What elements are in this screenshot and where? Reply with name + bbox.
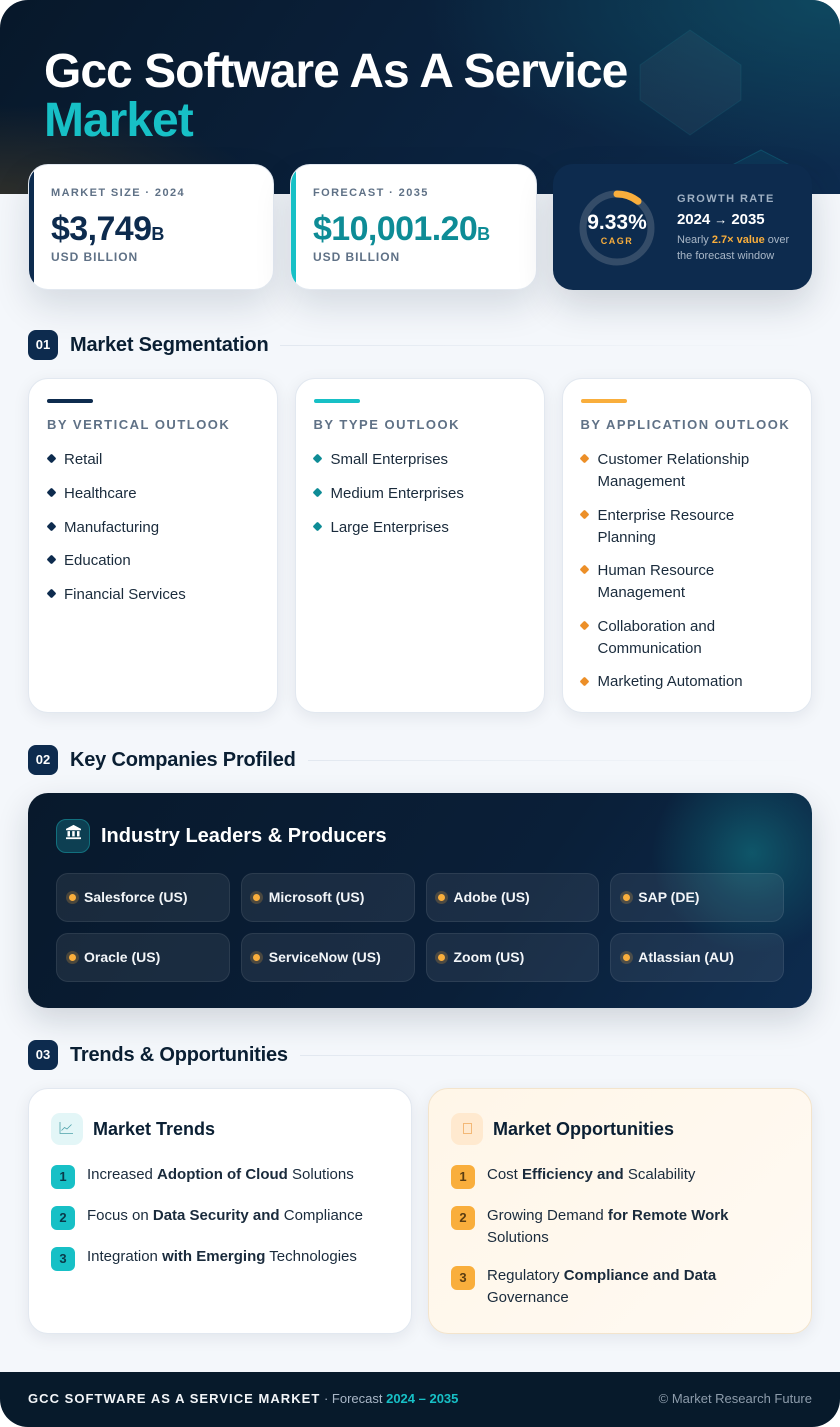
panel heading: Industry Leaders & Producers <box>101 825 387 847</box>
growth note: Nearly 2.7× value over <box>677 234 789 246</box>
panel: industry leaders: Atlassian (AU) <box>638 949 734 965</box>
CAGR value: 9.33% <box>587 211 647 234</box>
stat card: forecast: FORECAST · 2035 <box>313 187 429 199</box>
growth label: GROWTH RATE <box>677 193 775 205</box>
panel: market trends: Increased Adoption of Cloud Solutions <box>87 1166 354 1182</box>
section heading: market segmentation: Market Segmentation <box>70 334 268 356</box>
panel: by vertical outlook: Education <box>64 552 131 568</box>
CAGR donut <box>580 190 654 266</box>
section heading: trends: 03 <box>36 1047 50 1062</box>
panel: market opportunities: 2 <box>459 1210 467 1225</box>
stat card: forecast <box>290 164 537 290</box>
stat card: market size <box>28 164 274 290</box>
growth note <box>677 234 789 262</box>
icon: missing glyph box <box>451 1113 483 1145</box>
stat card: market size: $3,749B <box>51 210 164 248</box>
growth years: 2024 → 2035 <box>677 211 765 228</box>
panel: industry leaders: Zoom (US) <box>454 949 524 965</box>
footer credit: © Market Research Future <box>659 1391 812 1406</box>
section heading: trends: Trends & Opportunities <box>70 1044 288 1066</box>
panel: industry leaders: Oracle (US) <box>84 949 160 965</box>
panel: industry leaders: Microsoft (US) <box>269 889 364 905</box>
panel: by application outlook: Management <box>598 472 685 490</box>
growth note: the forecast window <box>677 250 774 262</box>
panel: market trends: 2 <box>59 1210 67 1225</box>
panel: market trends: 3 <box>59 1251 67 1266</box>
panel: industry leaders: Adobe (US) <box>454 889 530 905</box>
panel: market opportunities: 1 <box>459 1169 467 1184</box>
panel: market trends: 1 <box>59 1169 67 1184</box>
title: Gcc Software As A Service <box>44 45 627 98</box>
panel: by application outlook: Human Resource <box>598 562 714 578</box>
panel: by application outlook: Planning <box>598 528 656 546</box>
panel: industry leaders: ServiceNow (US) <box>269 949 381 965</box>
panel: market opportunities: 3 <box>459 1270 467 1285</box>
title <box>44 45 627 147</box>
panel: market trends <box>28 1088 412 1334</box>
panel: market opportunities <box>428 1088 812 1334</box>
panel: market opportunities: Solutions <box>487 1228 549 1246</box>
footer title: GCC SOFTWARE AS A SERVICE MARKET · Forecast 2024 – 2035 <box>28 1391 458 1406</box>
panel: by type outlook: BY TYPE OUTLOOK <box>314 417 460 432</box>
panel: by vertical outlook: BY VERTICAL OUTLOOK <box>47 417 230 432</box>
panel: by vertical outlook: Retail <box>64 450 102 468</box>
panel: by type outlook: Small Enterprises <box>330 450 448 468</box>
panel: by vertical outlook: Manufacturing <box>64 518 159 536</box>
icon: chart <box>51 1113 83 1145</box>
panel: by application outlook: Collaboration and <box>598 618 715 634</box>
CAGR label: CAGR <box>601 236 633 246</box>
section heading: trends <box>28 1040 582 1070</box>
section heading: market segmentation: 01 <box>36 337 50 352</box>
panel: industry leaders: SAP (DE) <box>638 889 699 905</box>
panel: by type outlook: Large Enterprises <box>330 518 449 536</box>
section heading: key companies: Key Companies Profiled <box>70 749 296 771</box>
panel: market opportunities: Cost Efficiency and Scalability <box>487 1166 695 1182</box>
panel: market opportunities: Growing Demand for Remote Work <box>487 1206 728 1224</box>
panel: by type outlook: Medium Enterprises <box>330 484 464 502</box>
section heading: key companies: 02 <box>36 752 50 767</box>
stat card: market size: USD BILLION <box>51 250 138 264</box>
panel: market opportunities: Regulatory Compliance and Data <box>487 1266 716 1284</box>
panel: by application outlook: Enterprise Resource <box>598 506 734 524</box>
header banner <box>0 0 840 194</box>
section heading: market segmentation <box>28 330 572 360</box>
panel: by application outlook: Marketing Automation <box>598 673 743 690</box>
company chips: Salesforce (US) <box>84 889 187 905</box>
panel: by application outlook: BY APPLICATION OUTLOOK <box>580 417 790 432</box>
section heading: key companies <box>28 745 586 775</box>
panel: by application outlook: Customer Relationship <box>598 450 749 468</box>
panel: by application outlook <box>562 378 812 713</box>
title: Market <box>44 94 193 147</box>
panel: by type outlook <box>295 378 545 713</box>
panel: market trends: Market Trends <box>93 1119 215 1139</box>
icon: bank <box>56 819 90 853</box>
stat card: forecast: USD BILLION <box>313 250 400 264</box>
panel: by vertical outlook <box>28 378 278 713</box>
panel: market trends: Focus on Data Security and Compliance <box>87 1206 363 1224</box>
footer <box>0 1372 840 1427</box>
panel: by application outlook: Communication <box>598 640 702 656</box>
panel: industry leaders <box>28 793 812 1008</box>
decorative hexagons <box>640 30 788 164</box>
panel: by application outlook: Management <box>598 584 685 600</box>
stat card: forecast: $10,001.20B <box>313 210 490 248</box>
company chips <box>56 873 230 922</box>
panel: by vertical outlook: Healthcare <box>64 484 137 502</box>
panel: by vertical outlook: Financial Services <box>64 586 186 602</box>
panel: market opportunities: Governance <box>487 1288 569 1306</box>
panel: market trends: Integration with Emerging Technologies <box>87 1248 357 1264</box>
stat card: market size: MARKET SIZE · 2024 <box>51 187 185 199</box>
panel: market opportunities: Market Opportunities <box>493 1119 674 1139</box>
stat card: growth rate <box>553 164 812 290</box>
